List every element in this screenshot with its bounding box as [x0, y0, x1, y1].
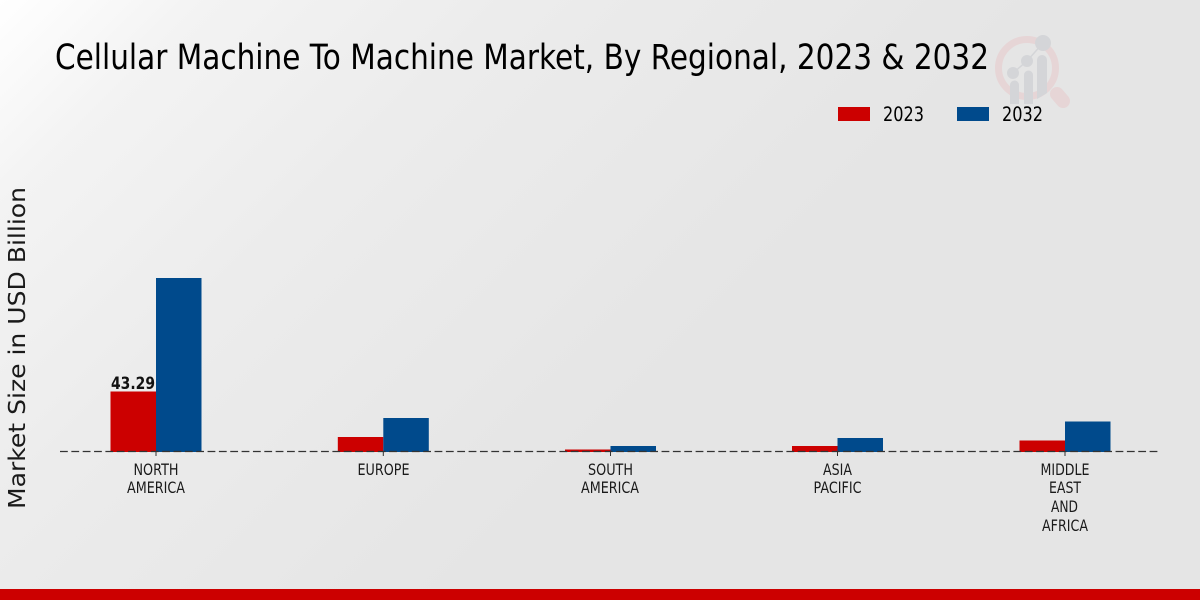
label: North America: NORTH	[134, 460, 178, 479]
label: Asia Pacific: PACIFIC	[814, 478, 862, 497]
label: South America: AMERICA	[581, 478, 639, 497]
legend item: 2032	[957, 103, 1043, 126]
legend	[838, 103, 1043, 126]
label: Asia Pacific	[814, 460, 862, 497]
label: South America	[581, 460, 639, 497]
bar chart	[60, 278, 1158, 456]
legend item: 2023: 2023	[883, 103, 924, 126]
label: North America	[127, 460, 185, 497]
bars: Asia Pacific	[792, 438, 883, 452]
label: Middle East and Africa: AND	[1051, 497, 1078, 516]
label: North America: AMERICA	[127, 478, 185, 497]
legend item: 2032: 2032	[1002, 103, 1043, 126]
data label: 43.29: 43.29	[111, 374, 155, 393]
bars: North America	[110, 278, 202, 452]
label: Middle East and Africa	[1040, 460, 1090, 535]
label: Middle East and Africa: EAST	[1049, 478, 1081, 497]
legend item: 2023	[838, 103, 924, 126]
y-axis label: Market Size in USD Billion	[3, 187, 31, 509]
label: Middle East and Africa: AFRICA	[1042, 516, 1088, 535]
label: Middle East and Africa: MIDDLE	[1040, 460, 1090, 479]
title: Cellular Machine To Machine Market, By Regional, 2023 & 2032	[55, 38, 989, 78]
footer bar	[0, 589, 1200, 600]
bars: Europe	[338, 418, 429, 452]
icon: magnifier logo watermark	[998, 35, 1063, 104]
label: Europe: EUROPE	[358, 460, 410, 479]
label: Asia Pacific: ASIA	[823, 460, 852, 479]
bars: South America	[565, 446, 656, 452]
bars: Middle East and Africa	[1020, 422, 1110, 452]
label: South America: SOUTH	[588, 460, 633, 479]
x-axis category labels	[127, 460, 1090, 535]
